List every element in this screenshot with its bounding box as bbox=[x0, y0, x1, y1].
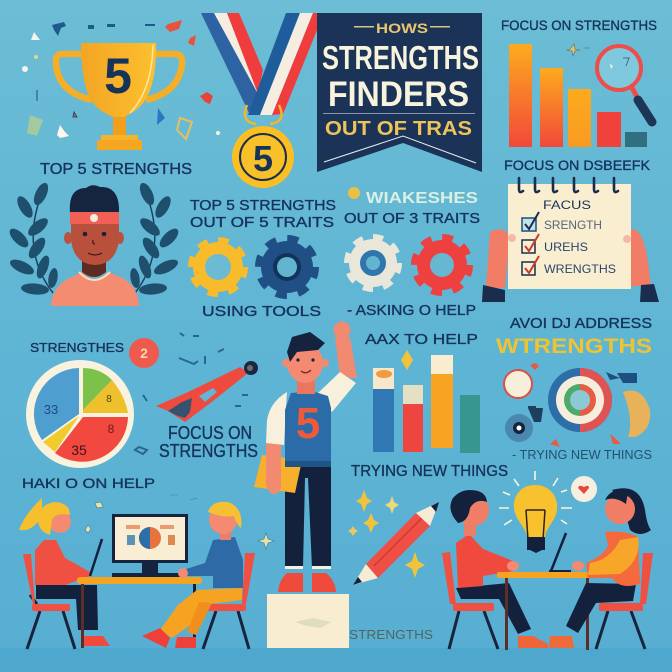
pants bbox=[285, 466, 331, 568]
notepad with checklist held by hands bbox=[482, 178, 659, 302]
laptop bbox=[551, 533, 566, 571]
notepad with checklist held by hands: UREHS bbox=[544, 240, 588, 254]
left chair bbox=[449, 611, 498, 649]
table bbox=[77, 577, 202, 584]
chair right bbox=[203, 611, 249, 649]
laptop bbox=[90, 539, 102, 576]
icon: red pointer tool bbox=[156, 361, 258, 422]
student standing on podium bbox=[254, 322, 357, 648]
pie chart bbox=[26, 360, 134, 468]
icon: trophy: 5 bbox=[104, 48, 132, 104]
icon: red pencil bbox=[353, 502, 439, 585]
bar chart: strengths bbox=[509, 44, 647, 147]
heading: weaknesses bbox=[348, 187, 478, 207]
table bbox=[497, 572, 594, 578]
icon: medal with ribbon bbox=[201, 13, 324, 188]
icon: yellow gear bbox=[192, 241, 244, 293]
heading: top 5 strengths out of 5 traits bbox=[190, 198, 336, 231]
pie chart: 35 bbox=[71, 442, 87, 458]
bar chart: pencils bbox=[373, 355, 480, 453]
boy bbox=[160, 588, 242, 638]
neck bbox=[297, 378, 315, 394]
icon: blue gear bbox=[259, 239, 315, 295]
right laurel bbox=[129, 181, 181, 296]
decorative scatter around pointer bbox=[135, 333, 248, 454]
heading: focus on strengths: FOCUS ON STRENGTHS bbox=[501, 17, 657, 33]
icon: trophy bbox=[56, 43, 182, 150]
student scene at laptop and monitor bbox=[19, 498, 255, 649]
title banner bbox=[317, 13, 482, 172]
raised arm bbox=[335, 337, 357, 378]
heading: focus on strengths: FOCUS ON bbox=[168, 423, 252, 443]
label: strengthes: STRENGTHES bbox=[30, 340, 124, 355]
girl bbox=[566, 583, 636, 633]
heading: focus on deficits: FOCUS ON DSBEEFK bbox=[504, 157, 651, 173]
icon: red gear bbox=[415, 238, 469, 292]
heading: avoid and address: AVOI DJ ADDRESS bbox=[510, 315, 652, 332]
heading: top 5 strengths out of 5 traits: OUT OF 5 TRAITS bbox=[190, 215, 334, 231]
icon: gold stars bbox=[348, 350, 425, 578]
heading: focus on strengths: STRENGTHS bbox=[159, 441, 258, 461]
title banner: OUT OF TRAS bbox=[325, 118, 472, 140]
icon: grey gear bbox=[348, 238, 398, 288]
label: trying new things: TRYING NEW THINGS bbox=[351, 463, 508, 480]
icon: lightbulb with rays bbox=[499, 471, 572, 553]
label: help: HAKI O ON HELP bbox=[22, 475, 155, 491]
title banner: HOWS bbox=[376, 20, 428, 36]
heading: top 5 strengths: TOP 5 STRENGTHS bbox=[40, 161, 192, 178]
shirt bbox=[285, 392, 331, 467]
pie chart: 33 bbox=[44, 402, 58, 417]
boy bbox=[456, 583, 531, 634]
label: ask for help: AAX TO HELP bbox=[365, 331, 478, 348]
icon: magnifying glass bbox=[597, 46, 652, 122]
heading: yellow strengths: WTRENGTHS bbox=[496, 335, 652, 358]
pie chart: 8 bbox=[106, 394, 112, 405]
left sleeve bbox=[266, 392, 287, 445]
girl bbox=[36, 585, 98, 630]
lower arm bbox=[266, 443, 281, 494]
heading: focus on strengths bbox=[159, 423, 258, 461]
icon: medal with ribbon: 5 bbox=[253, 138, 273, 179]
portrait in laurel wreath bbox=[7, 181, 181, 306]
heading: top 5 strengths out of 5 traits: TOP 5 STRENGTHS bbox=[190, 198, 336, 214]
heading: weaknesses: WIAKESHES bbox=[366, 190, 478, 207]
notepad with checklist held by hands: SRENGTH bbox=[544, 218, 602, 232]
label: asking for help: - ASKING O HELP bbox=[347, 302, 476, 319]
book bbox=[254, 455, 302, 493]
decorative sparkle cluster bbox=[85, 495, 274, 549]
chair left bbox=[27, 595, 75, 649]
icon: heart speech bubble bbox=[571, 476, 597, 502]
podium bbox=[267, 594, 349, 648]
left laurel bbox=[7, 181, 59, 296]
monitor bbox=[112, 514, 188, 563]
pie chart: 8 bbox=[108, 422, 115, 436]
badge: number 2 bbox=[129, 338, 159, 368]
notepad with checklist held by hands: FACUS bbox=[543, 198, 591, 212]
label: trying new things small: - TRYING NEW THINGS bbox=[512, 447, 652, 462]
two students talking at table bbox=[442, 488, 653, 650]
title banner: FINDERS bbox=[328, 75, 469, 114]
right chair bbox=[596, 611, 645, 649]
notepad with checklist held by hands: WRENGTHS bbox=[544, 262, 616, 276]
raised sleeve bbox=[318, 372, 356, 412]
shoes bbox=[278, 573, 303, 592]
label: using tools: USING TOOLS bbox=[202, 303, 321, 320]
head bbox=[282, 359, 290, 367]
title banner: STRENGTHS bbox=[322, 39, 479, 76]
sparkle bbox=[567, 44, 590, 56]
heading: out of 3 traits: OUT OF 3 TRAITS bbox=[344, 211, 480, 227]
student standing on podium: 5 bbox=[296, 399, 320, 448]
label: podium text strengths: STRENGTHS bbox=[349, 627, 433, 642]
badge: number 2: 2 bbox=[140, 345, 148, 361]
decorative confetti near trophy bbox=[22, 20, 220, 139]
target chart icons bbox=[504, 363, 650, 447]
